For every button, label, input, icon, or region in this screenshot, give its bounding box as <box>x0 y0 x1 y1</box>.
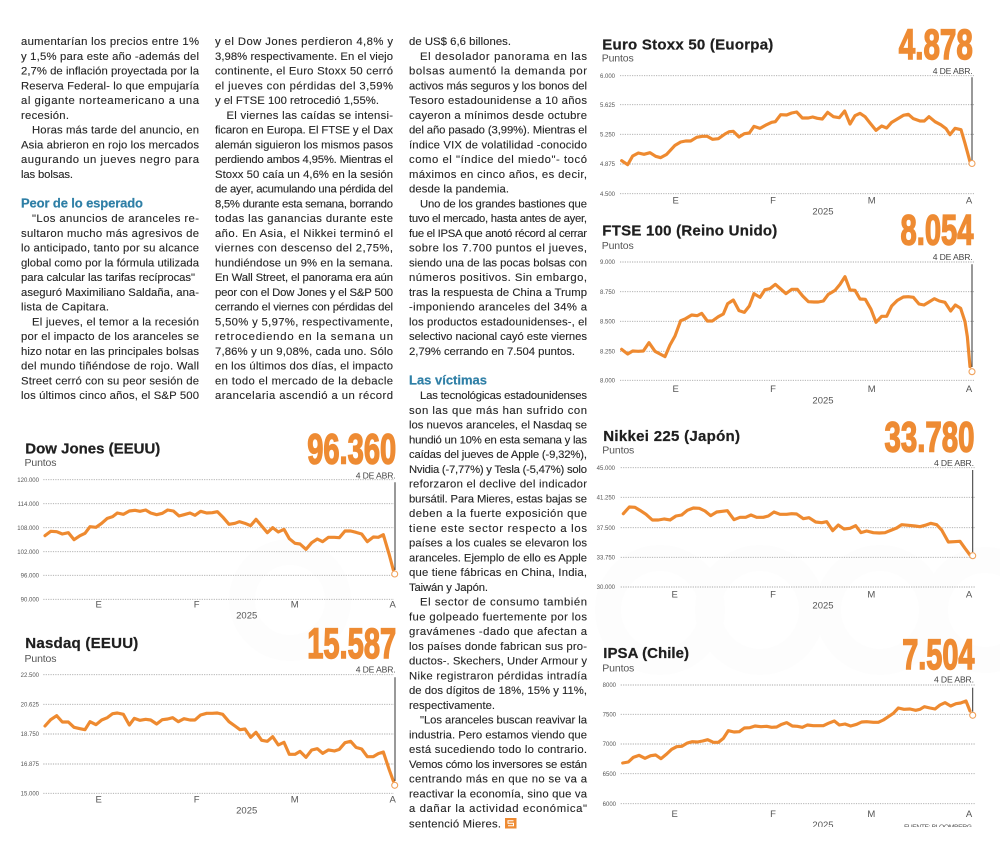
grid and axis: 2025 <box>812 820 834 831</box>
text column 3: del año pasado (3,99%). Mientras el <box>409 124 587 136</box>
text column 3: fue el IPSA que anotó récord al cerrar <box>409 228 587 240</box>
grid and axis: 4.500 <box>600 192 616 198</box>
grid and axis: E <box>673 384 679 395</box>
big value: 96.360 <box>307 427 396 474</box>
text column 2: de ayer, acumulando una pérdida del <box>215 184 393 196</box>
text column 1: recesión. <box>21 110 69 122</box>
text column 2 <box>215 36 393 402</box>
line series <box>45 713 393 781</box>
grid and axis: 8.000 <box>600 378 616 384</box>
grid and axis <box>600 74 975 217</box>
grid and axis: 6000 <box>603 802 617 808</box>
text column 2: y el Dow Jones perdieron 4,8% y <box>215 36 393 48</box>
text column 1: los últimos cinco años, el S&P 500 <box>21 390 199 402</box>
grid and axis: E <box>672 809 678 820</box>
unit label: Puntos <box>602 52 634 64</box>
text column 3: tiene este sector respecto a los <box>409 523 587 535</box>
text column 3: centrando más en que no se va a <box>409 774 588 786</box>
text column 1: lista de Capitara. <box>21 302 109 314</box>
text column 1: 2,7% de inflación proyectada por la <box>21 66 200 78</box>
grid and axis: 9.000 <box>600 260 616 266</box>
unit label: Puntos <box>602 240 634 252</box>
text column 2: El viernes las caídas se intensi- <box>226 110 393 122</box>
text column 3: que tiene fábricas en China, India, <box>409 567 587 579</box>
grid and axis: 90.000 <box>21 597 40 603</box>
text column 1: Street cerró con su peor sesión de <box>21 375 199 387</box>
line series <box>622 277 970 367</box>
text column 3: El desolador panorama en las <box>420 51 587 63</box>
end marker <box>969 264 975 375</box>
grid and axis: F <box>770 384 776 395</box>
text column 2: en los últimos dos días, el impacto <box>215 360 393 372</box>
text column 3: reactivar la economía, sino que va <box>409 788 588 800</box>
grid and axis: F <box>770 590 776 601</box>
grid and axis: 2025 <box>236 611 257 622</box>
text column 2: viernes con descenso del 2,75%, <box>215 242 393 254</box>
text column 3: bursátil. Para Mieres, estas bajas se <box>409 493 587 505</box>
title: FTSE 100 (Reino Unido) <box>602 222 777 240</box>
title: Nikkei 225 (Japón) <box>603 428 740 445</box>
grid and axis: 15.000 <box>21 791 40 797</box>
text column 2: ficaron en Europa. El FTSE y el Dax <box>215 124 393 136</box>
text column 1: Horas más tarde del anuncio, en <box>32 124 199 136</box>
text column 3: Nike registraron pérdidas intradía <box>409 670 588 682</box>
text column 2: 3,98% respectivamente. En el viejo <box>215 51 393 63</box>
text column 2: en todo el mercado de la debacle <box>215 375 393 387</box>
text column 3: ductos-. Skechers, Under Armour y <box>409 656 587 668</box>
text column 3: Uno de los grandes bastiones que <box>420 198 587 210</box>
text column 3: Nvidia (-7,77%) y Tesla (-5,47%) solo <box>409 464 587 476</box>
text column 3: Taiwán y Japón. <box>409 582 488 594</box>
grid and axis: 120.000 <box>17 478 40 484</box>
grid and axis: F <box>194 600 200 611</box>
line series <box>45 510 393 570</box>
grid and axis: 4.875 <box>600 162 616 168</box>
text column 2: peor con el Dow Jones y el S&P 500 <box>215 287 393 299</box>
text column 2: 8,5% durante esta semana, borrando <box>215 198 393 210</box>
text column 1 <box>21 36 200 402</box>
grid and axis: 2025 <box>812 206 834 217</box>
text column 2: y el FTSE 100 retrocedió 1,55%. <box>215 95 379 107</box>
text column 3: aranceles. Ejemplo de ello es Apple <box>409 552 587 564</box>
grid and axis: 8.750 <box>600 290 616 296</box>
text column 3: activos más seguros y los bonos del <box>409 80 587 92</box>
title: Dow Jones (EEUU) <box>25 440 160 458</box>
text column 3: reforzaron el declive del indicador <box>409 478 587 490</box>
grid and axis: E <box>96 795 102 806</box>
text column 1: al gigante norteamericano a una <box>21 95 200 107</box>
grid and axis: A <box>390 795 397 806</box>
text column 2: En Wall Street, el panorama era aún <box>215 272 393 284</box>
grid and axis: 18.750 <box>21 732 40 738</box>
text column 3: "Los aranceles buscan reavivar la <box>420 714 588 726</box>
grid and axis: E <box>672 590 678 601</box>
text column 1: aumentarían los precios entre 1% <box>21 36 199 48</box>
text column 1: para calcular las tarifas recíprocas" <box>21 272 195 284</box>
text column 3: El sector de consumo también <box>420 596 587 608</box>
end marker <box>392 677 398 788</box>
panel: IPSA chart <box>602 632 976 831</box>
title: Nasdaq (EEUU) <box>25 635 138 652</box>
grid and axis: 6.000 <box>600 74 616 80</box>
grid and axis: F <box>194 795 200 806</box>
text column 2: el jueves con pérdidas del 3,59% <box>215 80 393 92</box>
text column 3: 2,79% cerrando en 7.504 puntos. <box>409 346 575 358</box>
line series <box>622 111 970 165</box>
heading: Peor de lo esperado: Peor de lo esperado <box>21 195 143 210</box>
text column 3: -imponiendo aranceles del 34% a <box>409 302 588 314</box>
grid and axis: 114.000 <box>18 502 40 508</box>
grid and axis: A <box>390 600 397 611</box>
grid and axis: 102.000 <box>17 550 40 556</box>
text column 3: Tesoro estadounidense a 10 años <box>409 95 587 107</box>
grid and axis: 8000 <box>603 683 617 689</box>
end marker <box>392 482 398 577</box>
text column 1: global como por la fórmula utilizada <box>21 257 200 269</box>
text column 3: sobre los 7.700 puntos el jueves, <box>409 242 587 254</box>
text column 3: a dañar la actividad económica" <box>409 803 587 815</box>
text column 2: retrocediendo en la semana un <box>215 331 393 343</box>
unit label: Puntos <box>602 444 634 456</box>
text column 2: alemán siguieron los mismos pasos <box>215 139 393 151</box>
text column 1: las bolsas. <box>21 169 73 181</box>
grid and axis <box>21 673 397 817</box>
text column 3: de dos dígitos de 18%, 15% y 11%, <box>409 685 587 697</box>
grid and axis: 2025 <box>812 601 834 612</box>
text column 1: y 1,5% para este año -además del <box>21 51 199 63</box>
date label: 4 DE ABR. <box>933 66 973 76</box>
text column 3: industria. Pero estamos viendo que <box>409 729 587 741</box>
text column 3: números positivos. Sin embargo, <box>409 272 587 284</box>
text column 2: año. En Asia, el Nikkei terminó el <box>215 228 393 240</box>
unit label: Puntos <box>24 457 56 469</box>
grid and axis: 20.625 <box>21 702 40 708</box>
line series <box>623 507 970 555</box>
text column 2: 5,50% y 5,97%, respectivamente, <box>215 316 393 328</box>
grid and axis: M <box>291 795 299 806</box>
panel: Euro Stoxx 50 chart <box>600 22 975 217</box>
grid and axis <box>17 478 397 622</box>
text column 3: sentenció Mieres. <box>409 818 501 830</box>
grid and axis <box>600 260 975 406</box>
big value: 15.587 <box>307 621 396 668</box>
text column 3: índice VIX de volatilidad -conocido <box>409 139 587 151</box>
text column 3: está sucediendo todo lo contrario. <box>409 744 587 756</box>
text column 3: desde la pandemia. <box>409 184 509 196</box>
panel: FTSE 100 chart <box>600 208 975 406</box>
grid and axis: 45.000 <box>597 466 616 472</box>
text column 3: tras la respuesta de China a Trump <box>409 287 587 299</box>
heading: Las víctimas: Las víctimas <box>409 372 487 387</box>
text column 2: perdiendo ambos 4,95%. Mientras el <box>215 154 393 166</box>
date label: 4 DE ABR. <box>356 665 396 675</box>
grid and axis: A <box>966 195 973 206</box>
text column 1: augurando un jueves negro para <box>21 154 200 166</box>
text column 2: arancelaria ascendió a un récord <box>215 390 393 402</box>
grid and axis: 8.250 <box>600 349 616 355</box>
grid and axis: M <box>867 809 875 820</box>
text column 3: los países donde fabrican sus pro- <box>409 641 587 653</box>
icon: end mark <box>505 818 516 828</box>
text column 3: de US$ 6,6 billones. <box>409 36 511 48</box>
grid and axis: 6500 <box>603 772 617 778</box>
grid and axis: 7500 <box>603 712 617 718</box>
end marker <box>970 470 976 559</box>
panel: Dow Jones chart <box>17 427 398 622</box>
grid and axis <box>603 683 975 831</box>
text column 1: "Los anuncios de aranceles re- <box>32 213 199 225</box>
text column 3: Las tecnológicas estadounidenses <box>420 390 587 402</box>
grid and axis: 8.500 <box>600 319 616 325</box>
grid and axis: 37.500 <box>597 526 616 532</box>
text column 1: Asia abrieron en rojo los mercados <box>21 139 199 151</box>
end marker <box>970 688 976 718</box>
unit label: Puntos <box>602 662 634 674</box>
grid and axis: E <box>673 195 679 206</box>
grid and axis: A <box>966 590 973 601</box>
text column 3: fue golpeado fuertemente por los <box>409 611 587 623</box>
grid and axis: 7000 <box>603 742 617 748</box>
text column 3: países a los cuales se elevaron los <box>409 538 587 550</box>
text column 3: deben a la fuerte exposición que <box>409 508 587 520</box>
text column 3: máximos en cinco años, es decir, <box>409 169 587 181</box>
text column 3: hundió un 10% en esta semana y las <box>409 434 587 446</box>
text column 3: como el "índice del miedo"- tocó <box>409 154 587 166</box>
grid and axis: 33.750 <box>597 555 616 561</box>
grid and axis: F <box>770 809 776 820</box>
text column 3: siendo una de las pocas bolsas con <box>409 257 587 269</box>
text column 1: lo anticipado, tanto por su alcance <box>21 242 199 254</box>
grid and axis: 96.000 <box>21 573 40 579</box>
grid and axis: M <box>868 384 876 395</box>
date label: 4 DE ABR. <box>356 470 396 480</box>
source note: FUENTE: BLOOMBERG <box>904 824 972 831</box>
grid and axis: 30.000 <box>597 585 616 591</box>
text column 3: tuvo el mercado, hasta antes de ayer, <box>409 213 587 225</box>
unit label: Puntos <box>24 653 56 665</box>
text column 3: los nuevos aranceles, el Nasdaq se <box>409 420 587 432</box>
text column 2: hundiéndose un 9% en la semana. <box>215 257 393 269</box>
grid and axis: 22.500 <box>21 673 40 679</box>
panel: Nasdaq chart <box>21 621 398 817</box>
grid and axis: 108.000 <box>17 526 40 532</box>
text column 1: sultaron mucho más agresivos de <box>21 228 199 240</box>
text column 3 <box>409 36 588 830</box>
grid and axis: A <box>966 809 973 820</box>
text column 2: cerrando el viernes con pérdidas del <box>215 302 393 314</box>
text column 3: selectivo nacional cayó este viernes <box>409 331 587 343</box>
text column 3: los productos estadounidenses-, el <box>409 316 587 328</box>
text column 1: del mundo tiñéndose de rojo. Wall <box>21 360 199 372</box>
grid and axis <box>597 466 975 612</box>
grid and axis: 2025 <box>236 806 257 817</box>
text column 2: Stoxx 50 caía un 4,6% en la sesión <box>215 169 393 181</box>
title: Euro Stoxx 50 (Euorpa) <box>602 36 773 54</box>
date label: 4 DE ABR. <box>933 252 973 262</box>
grid and axis: M <box>291 600 299 611</box>
line series <box>623 701 970 763</box>
text column 3: bolsas aumentó la demanda por <box>409 66 587 78</box>
title: IPSA (Chile) <box>603 645 689 662</box>
end marker <box>969 77 975 166</box>
text column 3: son las que más han sufrido con <box>409 405 587 417</box>
grid and axis: E <box>96 600 102 611</box>
text column 1: por el impacto de los aranceles se <box>21 331 199 343</box>
grid and axis: M <box>867 590 875 601</box>
grid and axis: M <box>868 195 876 206</box>
grid and axis: 2025 <box>812 395 834 406</box>
date label: 4 DE ABR. <box>934 458 974 468</box>
grid and axis: A <box>966 384 973 395</box>
text column 1: aseguró Maximiliano Saldaña, ana- <box>21 287 199 299</box>
text column 2: continente, el Euro Stoxx 50 cerró <box>215 66 393 78</box>
grid and axis: 5.625 <box>600 103 616 109</box>
text column 2: todas las ganancias durante este <box>215 213 393 225</box>
date label: 4 DE ABR. <box>934 675 974 685</box>
text column 1: Reserva Federal- lo que empujaría <box>21 80 200 92</box>
text column 3: caídas del jueves de Apple (-9,32%), <box>409 449 587 461</box>
text column 3: respectivamente. <box>409 700 495 712</box>
text column 3: Vemos cómo los inversores se están <box>409 759 587 771</box>
panel: Nikkei 225 chart <box>597 414 976 612</box>
grid and axis: 16.875 <box>21 762 40 768</box>
text column 2: 7,86% y un 9,08%, cada uno. Sólo <box>215 346 393 358</box>
grid and axis: F <box>770 195 776 206</box>
text column 1: hizo notar en las principales bolsas <box>21 346 199 358</box>
text column 3: cayeron a mínimos desde octubre <box>409 110 587 122</box>
grid and axis: 5.250 <box>600 132 616 138</box>
grid and axis: 41.250 <box>597 495 616 501</box>
text column 3: gravámenes -dado que afectan a <box>409 626 588 638</box>
text column 1: El jueves, el temor a la recesión <box>32 316 199 328</box>
